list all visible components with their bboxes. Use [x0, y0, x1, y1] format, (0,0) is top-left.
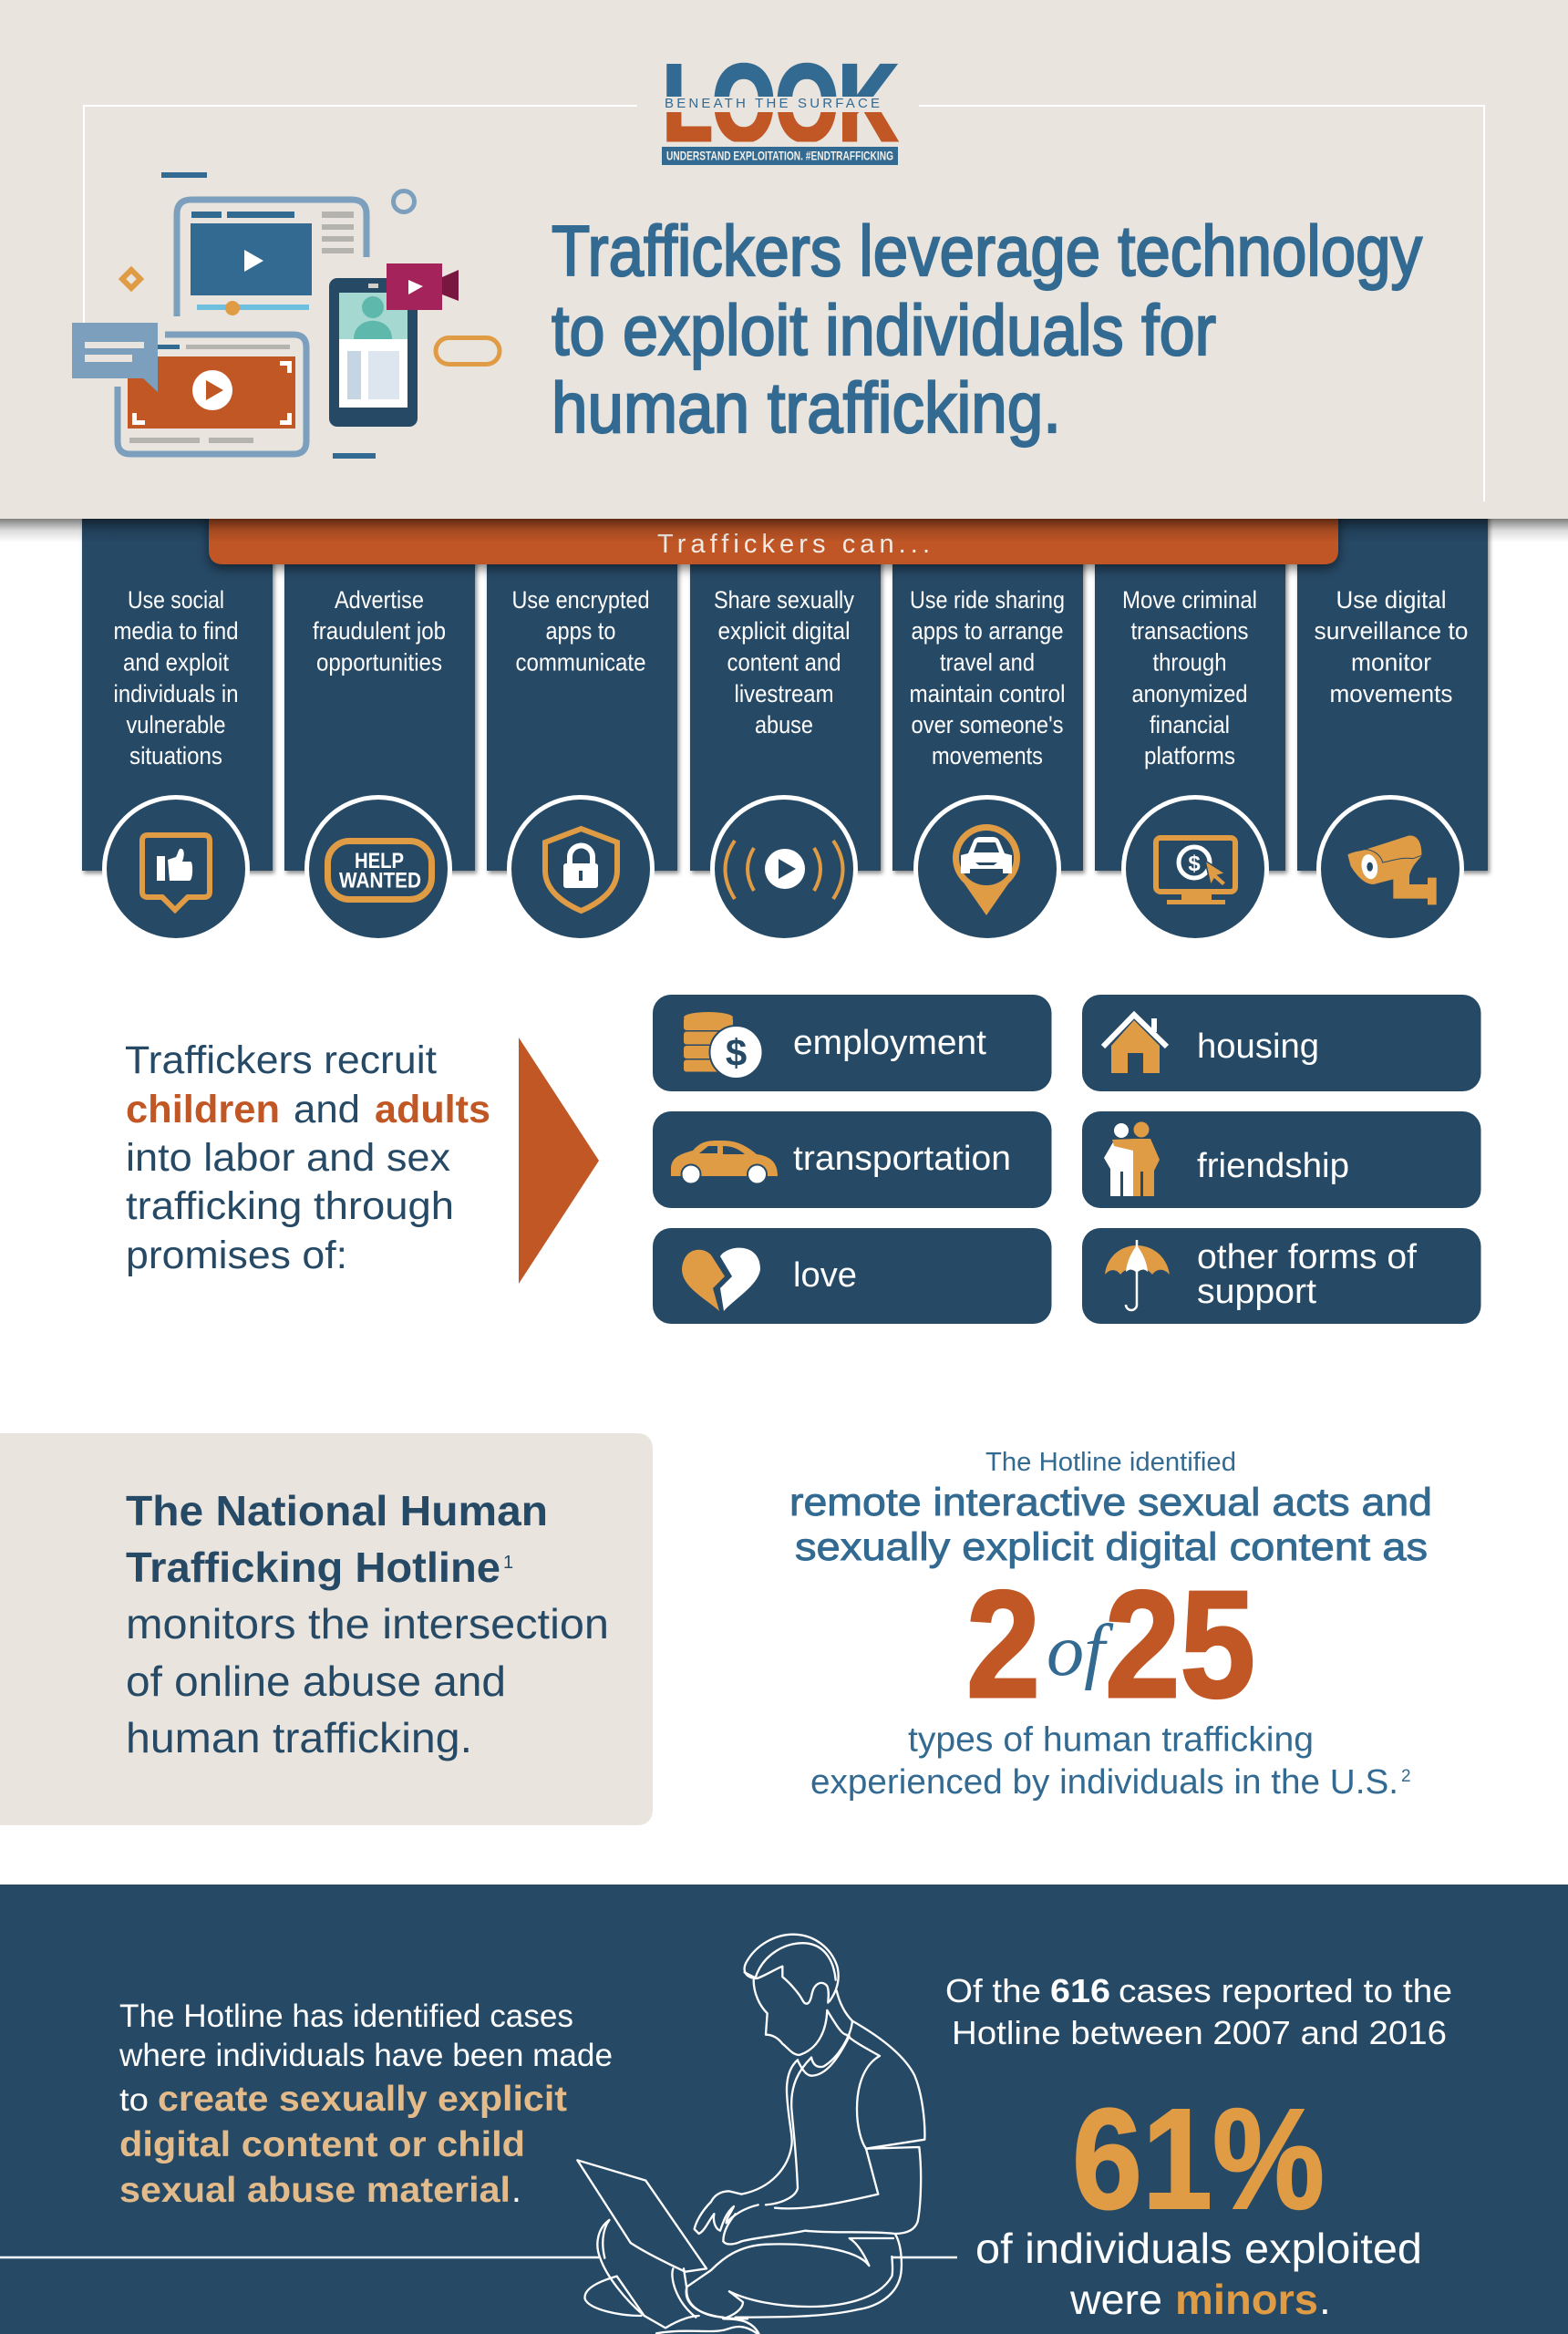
banner: traffickers can	[209, 511, 1338, 564]
icon: car location pin	[915, 797, 1059, 941]
card: transportation	[653, 1111, 1052, 1208]
text: column 4: explicit digital	[718, 617, 850, 645]
text: column 2: fraudulent job	[313, 617, 446, 645]
card: housing: housing	[1197, 1028, 1319, 1066]
text: column 5: apps to arrange	[912, 617, 1063, 645]
icon: help wanted: WANTED	[339, 868, 421, 893]
text: 616 cases: Of the	[945, 1972, 1041, 2009]
icon: help wanted	[306, 797, 450, 941]
text: individuals exploited: were	[1069, 2276, 1162, 2323]
arrow	[519, 1038, 599, 1284]
panel: national hotline: human trafficking.	[126, 1714, 472, 1761]
text: create content: sexual abuse material	[119, 2171, 511, 2210]
card: love: love	[793, 1256, 857, 1295]
panel: national hotline: of online abuse and	[126, 1658, 506, 1705]
text: create content	[119, 1998, 613, 2210]
text: hotline identified: sexually explicit digital content as	[795, 1525, 1428, 1569]
text: column 1: media to find	[113, 617, 239, 645]
text: 616 cases: cases reported to the	[1119, 1972, 1452, 2009]
text: 616 cases: Hotline between 2007 and 2016	[952, 2014, 1447, 2051]
text: column 5: Use ride sharing	[910, 586, 1065, 614]
logo: look beneath the surface	[662, 62, 899, 165]
text: recruit statement: Traffickers recruit	[125, 1038, 437, 1082]
text: types of human trafficking: 2	[1401, 1767, 1411, 1786]
card: employment	[653, 995, 1052, 1091]
title: to exploit individuals for	[552, 290, 1216, 370]
text: create content: .	[511, 2171, 521, 2210]
text: individuals exploited: of individuals exploited	[975, 2225, 1422, 2272]
text: column 6: anonymized	[1132, 680, 1247, 707]
card: transportation: transportation	[793, 1140, 1011, 1178]
text: column 7: Use digital	[1336, 586, 1446, 614]
icon: lock shield	[509, 797, 653, 941]
icon: monitor with dollar: $	[1188, 852, 1201, 876]
icon: help wanted: HELP	[355, 849, 404, 873]
text: 616 cases	[945, 1972, 1452, 2051]
text: recruit statement: children	[126, 1088, 280, 1131]
text: recruit statement: adults	[375, 1088, 490, 1131]
card: friendship	[1082, 1111, 1480, 1208]
stat: 2 of 25: 2	[966, 1560, 1040, 1730]
text: column 6	[1122, 586, 1257, 769]
icon: monitor with dollar	[1123, 797, 1267, 941]
text: column 4	[714, 586, 854, 738]
text: column 1: situations	[129, 742, 222, 769]
text: column 5	[910, 586, 1065, 769]
text: types of human trafficking	[810, 1721, 1411, 1802]
stat: 2 of 25: 25	[1105, 1560, 1255, 1730]
text: column 5: maintain control	[910, 680, 1065, 707]
text: column 6: transactions	[1130, 617, 1249, 645]
icon: surveillance camera	[1318, 797, 1462, 941]
text: column 1	[113, 586, 239, 769]
text: types of human trafficking: types of human trafficking	[908, 1721, 1314, 1760]
text: recruit statement: promises of:	[126, 1234, 347, 1277]
text: column 1: individuals in	[113, 680, 239, 707]
text: recruit statement	[125, 1038, 490, 1277]
text: column 6: platforms	[1144, 742, 1235, 769]
text: create content: create sexually explicit	[158, 2080, 567, 2119]
card: employment: $	[726, 1031, 747, 1074]
text: create content: to	[119, 2082, 149, 2118]
text: recruit statement: into labor and sex	[126, 1136, 451, 1180]
panel: bottom background	[0, 1885, 1568, 2334]
banner: traffickers can: Traffickers can...	[657, 530, 930, 559]
icon: social like	[104, 797, 248, 941]
text: column 3: Use encrypted	[512, 586, 649, 614]
card: other forms of support	[1082, 1228, 1480, 1324]
title	[552, 211, 1422, 448]
card: friendship: friendship	[1197, 1147, 1349, 1185]
text: column 1: vulnerable	[126, 711, 226, 738]
text: types of human trafficking: experienced by individuals in the U.S.	[810, 1763, 1398, 1802]
panel: action columns	[82, 511, 1488, 871]
logo: look beneath the surface: LOOK	[663, 43, 897, 164]
card: employment: employment	[793, 1024, 986, 1062]
text: column 7: monitor	[1351, 649, 1431, 676]
stat: 2 of 25: of	[1047, 1611, 1114, 1691]
text: column 2	[313, 586, 446, 676]
text: column 7: movements	[1329, 680, 1453, 707]
text: create content: where individuals have been made	[119, 2038, 613, 2073]
text: 616 cases: 616	[1050, 1972, 1110, 2009]
text: column 5: movements	[932, 742, 1043, 769]
card: housing	[1082, 995, 1480, 1091]
text: column 7: surveillance to	[1315, 617, 1468, 645]
stat: 2 of 25	[966, 1560, 1255, 1730]
logo: look beneath the surface: BENEATH THE SURFACE	[665, 96, 880, 111]
title: human trafficking.	[552, 367, 1061, 448]
text: create content: digital content or child	[119, 2125, 525, 2164]
panel: national hotline	[0, 1433, 653, 1825]
stat: 61 percent: 61%	[1072, 2080, 1325, 2239]
text: column 5: travel and	[940, 649, 1035, 676]
text: hotline identified: The Hotline identified	[985, 1448, 1236, 1477]
text: column 1: Use social	[128, 586, 224, 614]
text: individuals exploited: .	[1319, 2276, 1331, 2323]
panel: national hotline: monitors the intersection	[126, 1600, 609, 1647]
text: hotline identified	[789, 1448, 1432, 1569]
text: create content: The Hotline has identified cases	[119, 1998, 573, 2034]
text: column 4: livestream	[735, 680, 833, 707]
logo: look beneath the surface: LOOK	[663, 43, 897, 164]
icon: devices illustration	[72, 172, 500, 459]
text: column 6: Move criminal	[1122, 586, 1257, 614]
text: hotline identified: remote interactive sexual acts and	[789, 1481, 1432, 1524]
text: column 6: financial	[1150, 711, 1230, 738]
card: other forms of support: support	[1197, 1273, 1316, 1311]
text: recruit statement: trafficking through	[126, 1184, 454, 1228]
card: love	[653, 1228, 1052, 1324]
panel: header background	[0, 0, 1568, 542]
logo: look beneath the surface: UNDERSTAND EXPLOITATION. #ENDTRAFFICKING	[666, 148, 893, 162]
text: column 4: Share sexually	[714, 586, 854, 614]
panel: national hotline: 1	[503, 1553, 513, 1573]
text: column 4: content and	[727, 649, 841, 676]
text: column 1: and exploit	[123, 649, 229, 676]
text: column 2: Advertise	[335, 586, 424, 614]
text: individuals exploited	[975, 2225, 1422, 2323]
text: recruit statement: and	[294, 1088, 360, 1131]
card: other forms of support: other forms of	[1197, 1238, 1417, 1276]
text: column 4: abuse	[755, 711, 813, 738]
title: Traffickers leverage technology	[552, 211, 1422, 291]
panel: national hotline: Trafficking Hotline	[126, 1544, 500, 1591]
text: column 3: communicate	[516, 649, 645, 676]
illustration: person with laptop	[0, 1935, 957, 2334]
icon: livestream	[713, 797, 855, 941]
text: column 3	[512, 586, 649, 676]
text: column 5: over someone's	[912, 711, 1063, 738]
text: column 3: apps to	[545, 617, 616, 645]
text: column 7	[1315, 586, 1468, 707]
panel: national hotline: The National Human	[126, 1487, 548, 1534]
text: individuals exploited: minors	[1175, 2276, 1318, 2323]
text: column 2: opportunities	[316, 649, 442, 676]
text: column 6: through	[1152, 649, 1227, 676]
